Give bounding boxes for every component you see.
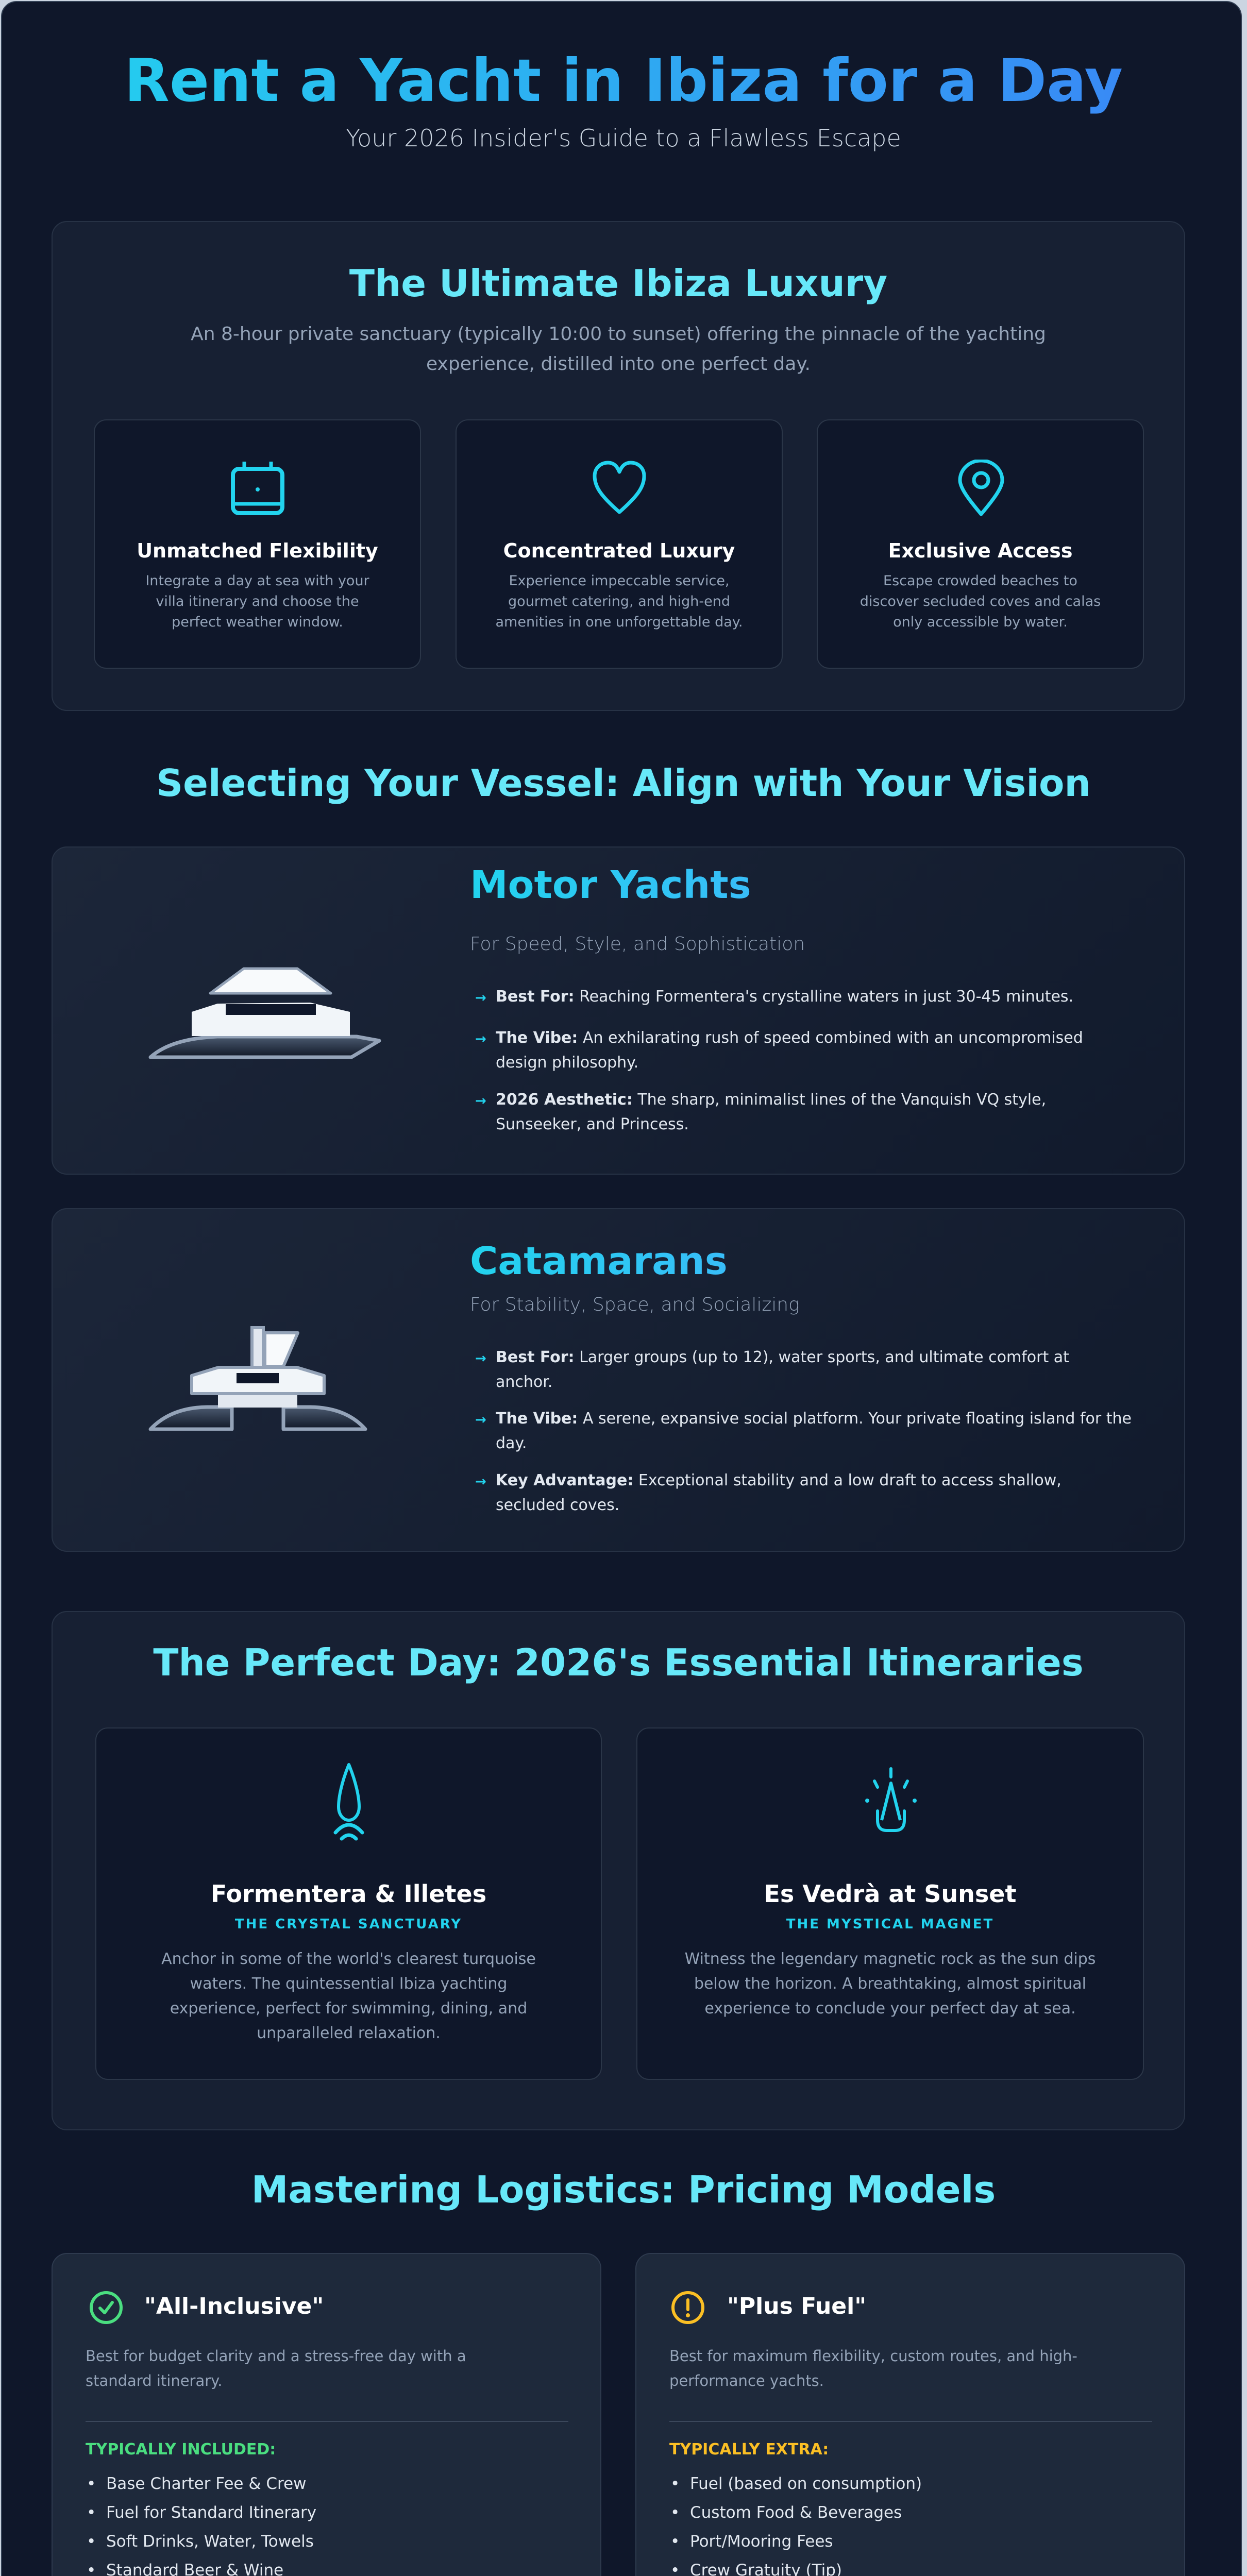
card title: Exclusive Access	[888, 539, 1072, 562]
subheading: For Speed, Style, and Sophistication	[470, 934, 805, 955]
card text: Anchor in some of the world's clearest turquoise waters. The quintessential Ibiza yachting experience, perfect for swimming, dining, and unparalleled relaxation.	[161, 1950, 536, 2042]
icon: catamaran	[148, 1326, 367, 1431]
heading: motor yachts: Motor Yachts	[470, 863, 751, 907]
panel: motor yachts: →	[475, 990, 486, 1006]
pricing description: Best for maximum flexibility, custom routes, and high-performance yachts.	[669, 2347, 1077, 2389]
list: extra	[673, 2475, 922, 2576]
list: extra: Custom Food & Beverages	[690, 2503, 902, 2522]
card text: Experience impeccable service, gourmet catering, and high-end amenities in one unforgettable day.	[495, 573, 743, 630]
pricing description: Best for budget clarity and a stress-free day with a standard itinerary.	[86, 2347, 466, 2389]
card: access	[817, 419, 1144, 669]
icon: check circle	[90, 2291, 123, 2324]
icon: calendar	[231, 462, 284, 515]
card: formentera	[95, 1727, 602, 2080]
bullet: aesthetic: 2026 Aesthetic: The sharp, minimalist lines of the Vanquish VQ style, Sunseeker, and Princess.	[496, 1091, 1046, 1133]
card text: Witness the legendary magnetic rock as the sun dips below the horizon. A breathtaking, almost spiritual experience to conclude your perfect day at sea.	[685, 1950, 1096, 2018]
subheading: For Stability, Space, and Socializing	[470, 1294, 800, 1315]
label: included: TYPICALLY INCLUDED:	[86, 2441, 276, 2459]
heading: ultimate luxury: The Ultimate Ibiza Luxury	[349, 262, 887, 305]
list: extra: Port/Mooring Fees	[690, 2532, 833, 2551]
bullet: best for: Best For: Reaching Formentera's crystalline waters in just 30-45 minutes.	[496, 988, 1073, 1006]
bullet list	[475, 1348, 1132, 1514]
panel: itineraries	[52, 1611, 1185, 2130]
list: included: Soft Drinks, Water, Towels	[106, 2532, 314, 2551]
pricing title: "All-Inclusive"	[144, 2293, 324, 2319]
heading: perfect day: The Perfect Day: 2026's Essential Itineraries	[153, 1641, 1084, 1684]
pricing title: "Plus Fuel"	[727, 2293, 866, 2319]
panel: catamarans: →	[475, 1351, 486, 1366]
list: extra: Fuel (based on consumption)	[690, 2475, 922, 2493]
icon: map pin	[958, 460, 1004, 516]
panel: motor yachts	[52, 846, 1185, 1175]
card text: Escape crowded beaches to discover secluded coves and calas only accessible by water.	[860, 573, 1101, 630]
panel: motor yachts: →	[475, 1031, 486, 1047]
title: Rent a Yacht in Ibiza for a Day	[124, 46, 1123, 115]
panel: ultimate ibiza luxury	[52, 221, 1185, 711]
panel: plus fuel	[635, 2253, 1185, 2576]
label: extra: TYPICALLY EXTRA:	[669, 2441, 829, 2459]
panel: motor yachts: →	[475, 1093, 486, 1109]
card title: Concentrated Luxury	[503, 539, 735, 562]
heading: pricing models: Mastering Logistics: Pricing Models	[251, 2168, 996, 2211]
intro text: An 8-hour private sanctuary (typically 10:00 to sunset) offering the pinnacle of the yachting experience, distilled into one perfect day.	[191, 324, 1046, 375]
bullet list	[475, 988, 1083, 1133]
panel: catamarans	[52, 1208, 1185, 1552]
icon: heart	[593, 461, 646, 514]
card text: Integrate a day at sea with your villa itinerary and choose the perfect weather window.	[145, 573, 369, 630]
icon: water drop	[334, 1763, 364, 1840]
card: es vedra	[636, 1727, 1144, 2080]
bullet: vibe: The Vibe: A serene, expansive social platform. Your private floating island for the day.	[496, 1410, 1132, 1452]
heading: catamarans: Catamarans	[470, 1239, 728, 1283]
panel: catamarans: →	[475, 1412, 486, 1428]
card: luxury	[456, 419, 783, 669]
list: included: Base Charter Fee & Crew	[106, 2475, 306, 2493]
panel: all-inclusive	[52, 2253, 601, 2576]
card: flexibility	[94, 419, 421, 669]
card subtitle: THE MYSTICAL MAGNET	[786, 1917, 994, 1932]
icon: sunset rock	[865, 1767, 917, 1832]
card subtitle: THE CRYSTAL SANCTUARY	[235, 1917, 462, 1932]
heading: selecting vessel: Selecting Your Vessel: Align with Your Vision	[156, 761, 1091, 805]
card title: Formentera & Illetes	[211, 1880, 486, 1908]
bullet: best for: Best For: Larger groups (up to 12), water sports, and ultimate comfort at anchor.	[496, 1348, 1069, 1391]
icon: motor yacht	[148, 968, 381, 1059]
card title: Unmatched Flexibility	[137, 539, 378, 562]
panel: catamarans: →	[475, 1474, 486, 1489]
list: included: Fuel for Standard Itinerary	[106, 2503, 316, 2522]
bullet: advantage: Key Advantage: Exceptional stability and a low draft to access shallow, secluded coves.	[496, 1471, 1061, 1514]
bullet: vibe: The Vibe: An exhilarating rush of speed combined with an uncompromised design philosophy.	[496, 1029, 1083, 1072]
icon: warning circle	[671, 2291, 704, 2324]
divider line	[86, 2421, 568, 2422]
subtitle: Your 2026 Insider's Guide to a Flawless Escape	[346, 124, 901, 152]
divider line	[669, 2421, 1152, 2422]
list: included	[89, 2475, 316, 2576]
card title: Es Vedrà at Sunset	[764, 1880, 1016, 1908]
